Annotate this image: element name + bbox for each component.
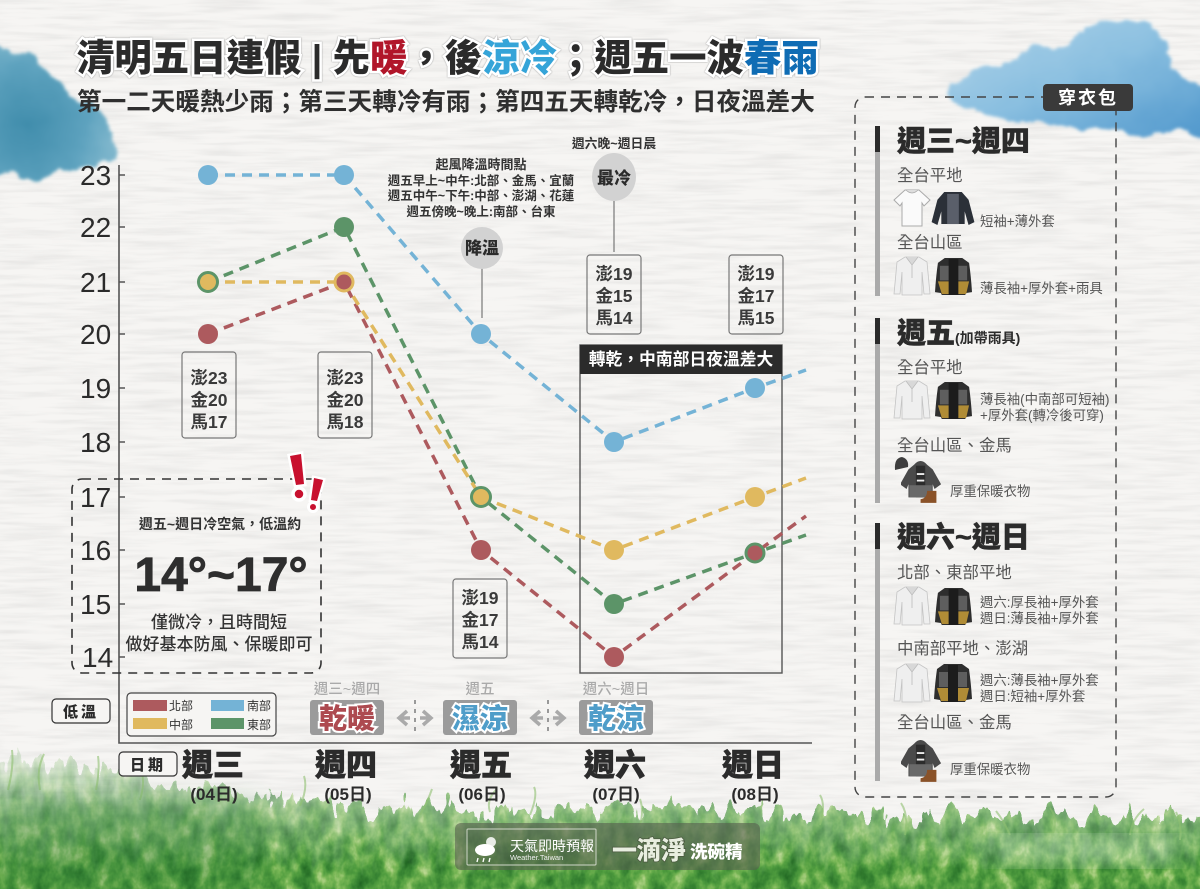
date axis labels: [182, 748, 784, 804]
island temps: Friday: 金17: [462, 610, 498, 630]
date axis labels: 週六: [584, 748, 646, 783]
bubble: coldest: [572, 136, 656, 252]
legend: 中部: [169, 717, 193, 732]
section: Wed to Thu: 全台平地: [897, 167, 963, 185]
island temps: Thursday: 馬18: [327, 412, 364, 432]
island temps: Sunday: [729, 255, 783, 334]
left watercolour cloud: [0, 47, 116, 178]
sponsor logo panel: [455, 823, 760, 870]
panel: clothing guide: [855, 84, 1133, 797]
grass footer: [0, 750, 1200, 889]
arrow: transition two: [532, 700, 564, 736]
island temps: Friday: 馬14: [462, 632, 499, 652]
chart axes and temperature scale: 17: [80, 482, 111, 513]
sponsor logo panel: 天氣即時預報: [510, 838, 594, 854]
section: Sat to Sun: 週日:短袖+厚外套: [980, 689, 1085, 704]
weather tag: wet cool: [443, 681, 517, 735]
date axis labels: 週五: [450, 748, 512, 783]
section: Wed to Thu: 週三~週四: [897, 125, 1030, 158]
section: Fri: 全台平地: [897, 359, 963, 377]
arrow: transition one: [399, 700, 431, 736]
date axis labels: 週四: [315, 748, 377, 783]
date axis labels: (05日): [324, 785, 372, 804]
date axis labels: (06日): [458, 785, 506, 804]
callout: cold air low temperature: [72, 479, 321, 673]
island temps: Wednesday: 金20: [191, 390, 228, 410]
legend: 東部: [247, 717, 271, 732]
section: Sat to Sun: 北部、東部平地: [897, 564, 1012, 582]
legend: 南部: [247, 698, 271, 713]
panel label: [1043, 84, 1133, 111]
section: Fri: 厚重保暖衣物: [950, 484, 1030, 499]
weather tag: dry warm: 週三~週四: [314, 681, 380, 698]
island temps: Thursday: [318, 352, 372, 438]
section: Fri: 薄長袖(中南部可短袖): [980, 392, 1109, 407]
panel label: 穿衣包: [1058, 87, 1118, 108]
box: dry and large day-night difference: [580, 345, 782, 673]
box: dry and large day-night difference: 轉乾，中南部日夜溫差大: [589, 349, 774, 369]
section: Sat to Sun: 週六~週日: [897, 521, 1030, 554]
weather tag: wet cool: 週五: [466, 681, 494, 698]
chart axes and temperature scale: 15: [80, 589, 111, 620]
chart axes and temperature scale: 22: [80, 212, 111, 243]
section: Fri: (加帶雨具): [955, 330, 1020, 346]
cooling timing note: 週五傍晚~晚上:南部、台東: [407, 204, 556, 219]
sponsor logo panel: 一滴淨: [612, 836, 686, 865]
tag: low temperature: [52, 699, 110, 723]
island temps: Saturday: 澎19: [596, 264, 633, 284]
date axis labels: (08日): [731, 785, 779, 804]
cooling timing note: 起風降溫時間點: [435, 157, 527, 172]
chart axes and temperature scale: 14: [82, 642, 113, 673]
callout: cold air low temperature: 僅微冷，且時間短: [151, 613, 287, 632]
date axis labels: (04日): [190, 785, 238, 804]
island temps: Friday: 澎19: [462, 588, 499, 608]
island temps: Thursday: 金20: [327, 390, 364, 410]
chart axes and temperature scale: 23: [80, 160, 111, 191]
chart axes and temperature scale: 19: [80, 373, 111, 404]
sponsor logo panel: Weather.Taiwan: [510, 853, 563, 862]
title: 清明五日連假 | 先暖，後涼冷；週五一波春雨: [77, 37, 819, 80]
date axis labels: 週日: [722, 748, 784, 783]
chart axes and temperature scale: [80, 160, 812, 743]
island temps: Wednesday: 澎23: [191, 368, 228, 388]
section: Fri: 週五: [897, 317, 955, 350]
date axis labels: (07日): [592, 785, 640, 804]
series: central: [198, 272, 806, 560]
island temps: Wednesday: 馬17: [191, 412, 227, 432]
island temps: Friday: [453, 579, 507, 658]
section: Fri: +厚外套(轉冷後可穿): [980, 408, 1104, 423]
cooling timing note: 週五早上~中午:北部、金馬、宜蘭: [388, 173, 574, 188]
section: Sat to Sun: 週日:薄長袖+厚外套: [980, 611, 1099, 626]
bubble: coldest: 週六晚~週日晨: [572, 136, 656, 151]
island temps: Saturday: [587, 255, 641, 334]
weather tag: dry cool: 週六~週日: [583, 681, 649, 698]
chart axes and temperature scale: 20: [80, 319, 111, 350]
section: Wed to Thu: [875, 125, 1103, 296]
section: Sat to Sun: 全台山區、金馬: [897, 714, 1012, 732]
date axis labels: 週三: [182, 748, 244, 783]
section: Wed to Thu: 薄長袖+厚外套+雨具: [980, 281, 1103, 296]
chart axes and temperature scale: 18: [80, 427, 111, 458]
section: Wed to Thu: 短袖+薄外套: [980, 214, 1055, 229]
weather tag: dry cool: [579, 681, 653, 735]
icon: weather cloud: [475, 837, 496, 862]
legend: [127, 693, 276, 736]
island temps: Sunday: 金17: [738, 286, 774, 306]
bubble: coldest: 最冷: [597, 168, 631, 188]
section: Sat to Sun: 週六:厚長袖+厚外套: [980, 595, 1099, 610]
island temps: Sunday: 澎19: [738, 264, 775, 284]
right watercolour cloud: [942, 18, 1200, 134]
icon: exclamation marks: [290, 454, 323, 512]
legend: 北部: [169, 698, 193, 713]
tag: date: 日期: [130, 756, 166, 774]
callout: cold air low temperature: 做好基本防風、保暖即可: [126, 635, 312, 654]
weather tag: dry warm: [310, 681, 384, 735]
series: east: [208, 217, 806, 614]
cooling timing note: [388, 157, 575, 219]
tag: date: [119, 752, 177, 776]
cooling timing note: 週五中午~下午:中部、澎湖、花蓮: [388, 188, 575, 203]
chart axes and temperature scale: 21: [80, 267, 111, 298]
section: Sat to Sun: 週六:薄長袖+厚外套: [980, 673, 1099, 688]
bubble: cooling: 降溫: [465, 238, 499, 258]
island temps: Thursday: 澎23: [327, 368, 364, 388]
series: south: [198, 165, 806, 452]
section: Sat to Sun: 中南部平地、澎湖: [897, 640, 1028, 658]
series: north: [198, 282, 806, 667]
section: Wed to Thu: 全台山區: [897, 234, 963, 252]
weather tag: dry cool: 乾涼: [588, 703, 644, 734]
callout: cold air low temperature: 14°~17°: [134, 549, 308, 602]
subtitle: 第一二天暖熱少雨；第三天轉冷有雨；第四五天轉乾冷，日夜溫差大: [77, 88, 815, 116]
island temps: Saturday: 馬14: [596, 308, 633, 328]
island temps: Sunday: 馬15: [738, 308, 775, 328]
weather tag: wet cool: 濕涼: [452, 703, 508, 734]
section: Sat to Sun: [875, 521, 1099, 782]
weather tag: dry warm: 乾暖: [319, 703, 375, 734]
chart axes and temperature scale: 16: [80, 535, 111, 566]
section: Fri: [875, 317, 1109, 503]
island temps: Wednesday: [182, 352, 236, 438]
island temps: Saturday: 金15: [596, 286, 633, 306]
callout: cold air low temperature: 週五~週日冷空氣，低溫約: [139, 516, 301, 532]
line chart: low temperature by region: [198, 165, 806, 667]
tag: low temperature: 低溫: [63, 703, 99, 721]
section: Fri: 全台山區、金馬: [897, 437, 1012, 455]
bubble: cooling: [461, 227, 503, 318]
section: Sat to Sun: 厚重保暖衣物: [950, 762, 1030, 777]
sponsor logo panel: 洗碗精: [690, 842, 742, 862]
